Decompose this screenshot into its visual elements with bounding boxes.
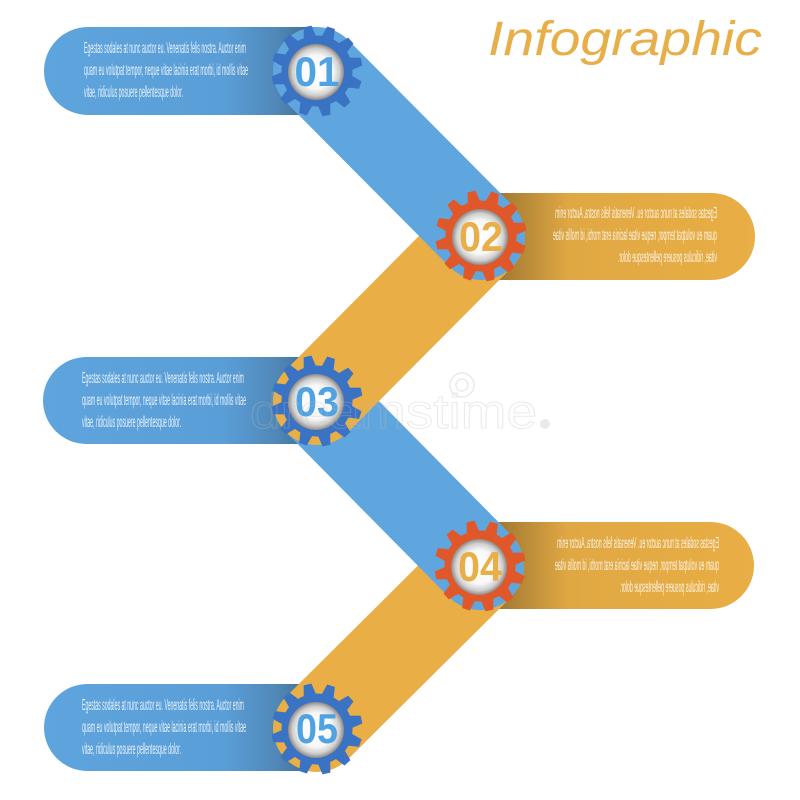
text: Egestas sodales at nunc auctor eu. Venenatis felis nostra. Auctor enim <box>555 205 717 222</box>
gear 03 <box>260 344 374 458</box>
text: Egestas sodales at nunc auctor eu. Venenatis felis nostra. Auctor enim <box>84 40 246 57</box>
gear 05 <box>260 672 374 786</box>
text block: step 05 <box>82 697 246 758</box>
text block: step 05: vitae, ridiculus posuere pellentesque dolor. <box>82 741 181 758</box>
text: Egestas sodales at nunc auctor eu. Venenatis felis nostra. Auctor enim <box>82 370 244 387</box>
text block: step 01: vitae, ridiculus posuere pellentesque dolor. <box>84 84 183 101</box>
gear 01 <box>260 14 374 128</box>
gear 02 <box>424 179 538 293</box>
text block: step 02 mirrored <box>553 205 717 266</box>
band: 04 to 05 <box>317 566 480 728</box>
gear 02: 02 <box>459 213 503 260</box>
text: quam eu volutpat tempor, neque vitae lacinia erat morbi, id mollis vitae <box>82 719 246 736</box>
text block: step 02 mirrored: vitae, ridiculus posuere pellentesque dolor. <box>618 249 717 266</box>
gear 03: 03 <box>295 378 339 425</box>
text: quam eu volutpat tempor, neque vitae lacinia erat morbi, id mollis vitae <box>82 392 246 409</box>
band: 03 to 04 <box>317 401 480 566</box>
text block: step 03 <box>82 370 246 431</box>
gear 01: 01 <box>294 48 340 95</box>
band: 01 to 02 <box>317 71 481 236</box>
text block: step 01 <box>84 40 248 101</box>
gear 04: 04 <box>458 543 503 590</box>
text: quam eu volutpat tempor, neque vitae lacinia erat morbi, id mollis vitae <box>84 62 248 79</box>
panel: step 01 text pill <box>44 27 317 115</box>
text block: step 04 mirrored <box>555 535 719 596</box>
text block: step 03: vitae, ridiculus posuere pellentesque dolor. <box>82 414 181 431</box>
panel: step 05 text pill <box>44 684 317 771</box>
panel: step 02 text pill <box>481 193 755 280</box>
gear 04 <box>423 509 537 623</box>
watermark <box>250 373 550 439</box>
panel: step 04 text pill <box>480 522 754 609</box>
gear 05: 05 <box>296 705 338 752</box>
text block: step 04 mirrored: vitae, ridiculus posuere pellentesque dolor. <box>620 579 719 596</box>
text: quam eu volutpat tempor, neque vitae lacinia erat morbi, id mollis vitae <box>553 227 717 244</box>
text: Egestas sodales at nunc auctor eu. Venenatis felis nostra. Auctor enim <box>82 697 244 714</box>
panel: step 03 text pill <box>43 357 317 444</box>
text: Egestas sodales at nunc auctor eu. Venenatis felis nostra. Auctor enim <box>557 535 719 552</box>
band: 02 to 03 <box>317 236 481 401</box>
text: quam eu volutpat tempor, neque vitae lacinia erat morbi, id mollis vitae <box>555 557 719 574</box>
watermark: dreamstime <box>250 386 537 439</box>
title: Infographic <box>488 13 762 66</box>
